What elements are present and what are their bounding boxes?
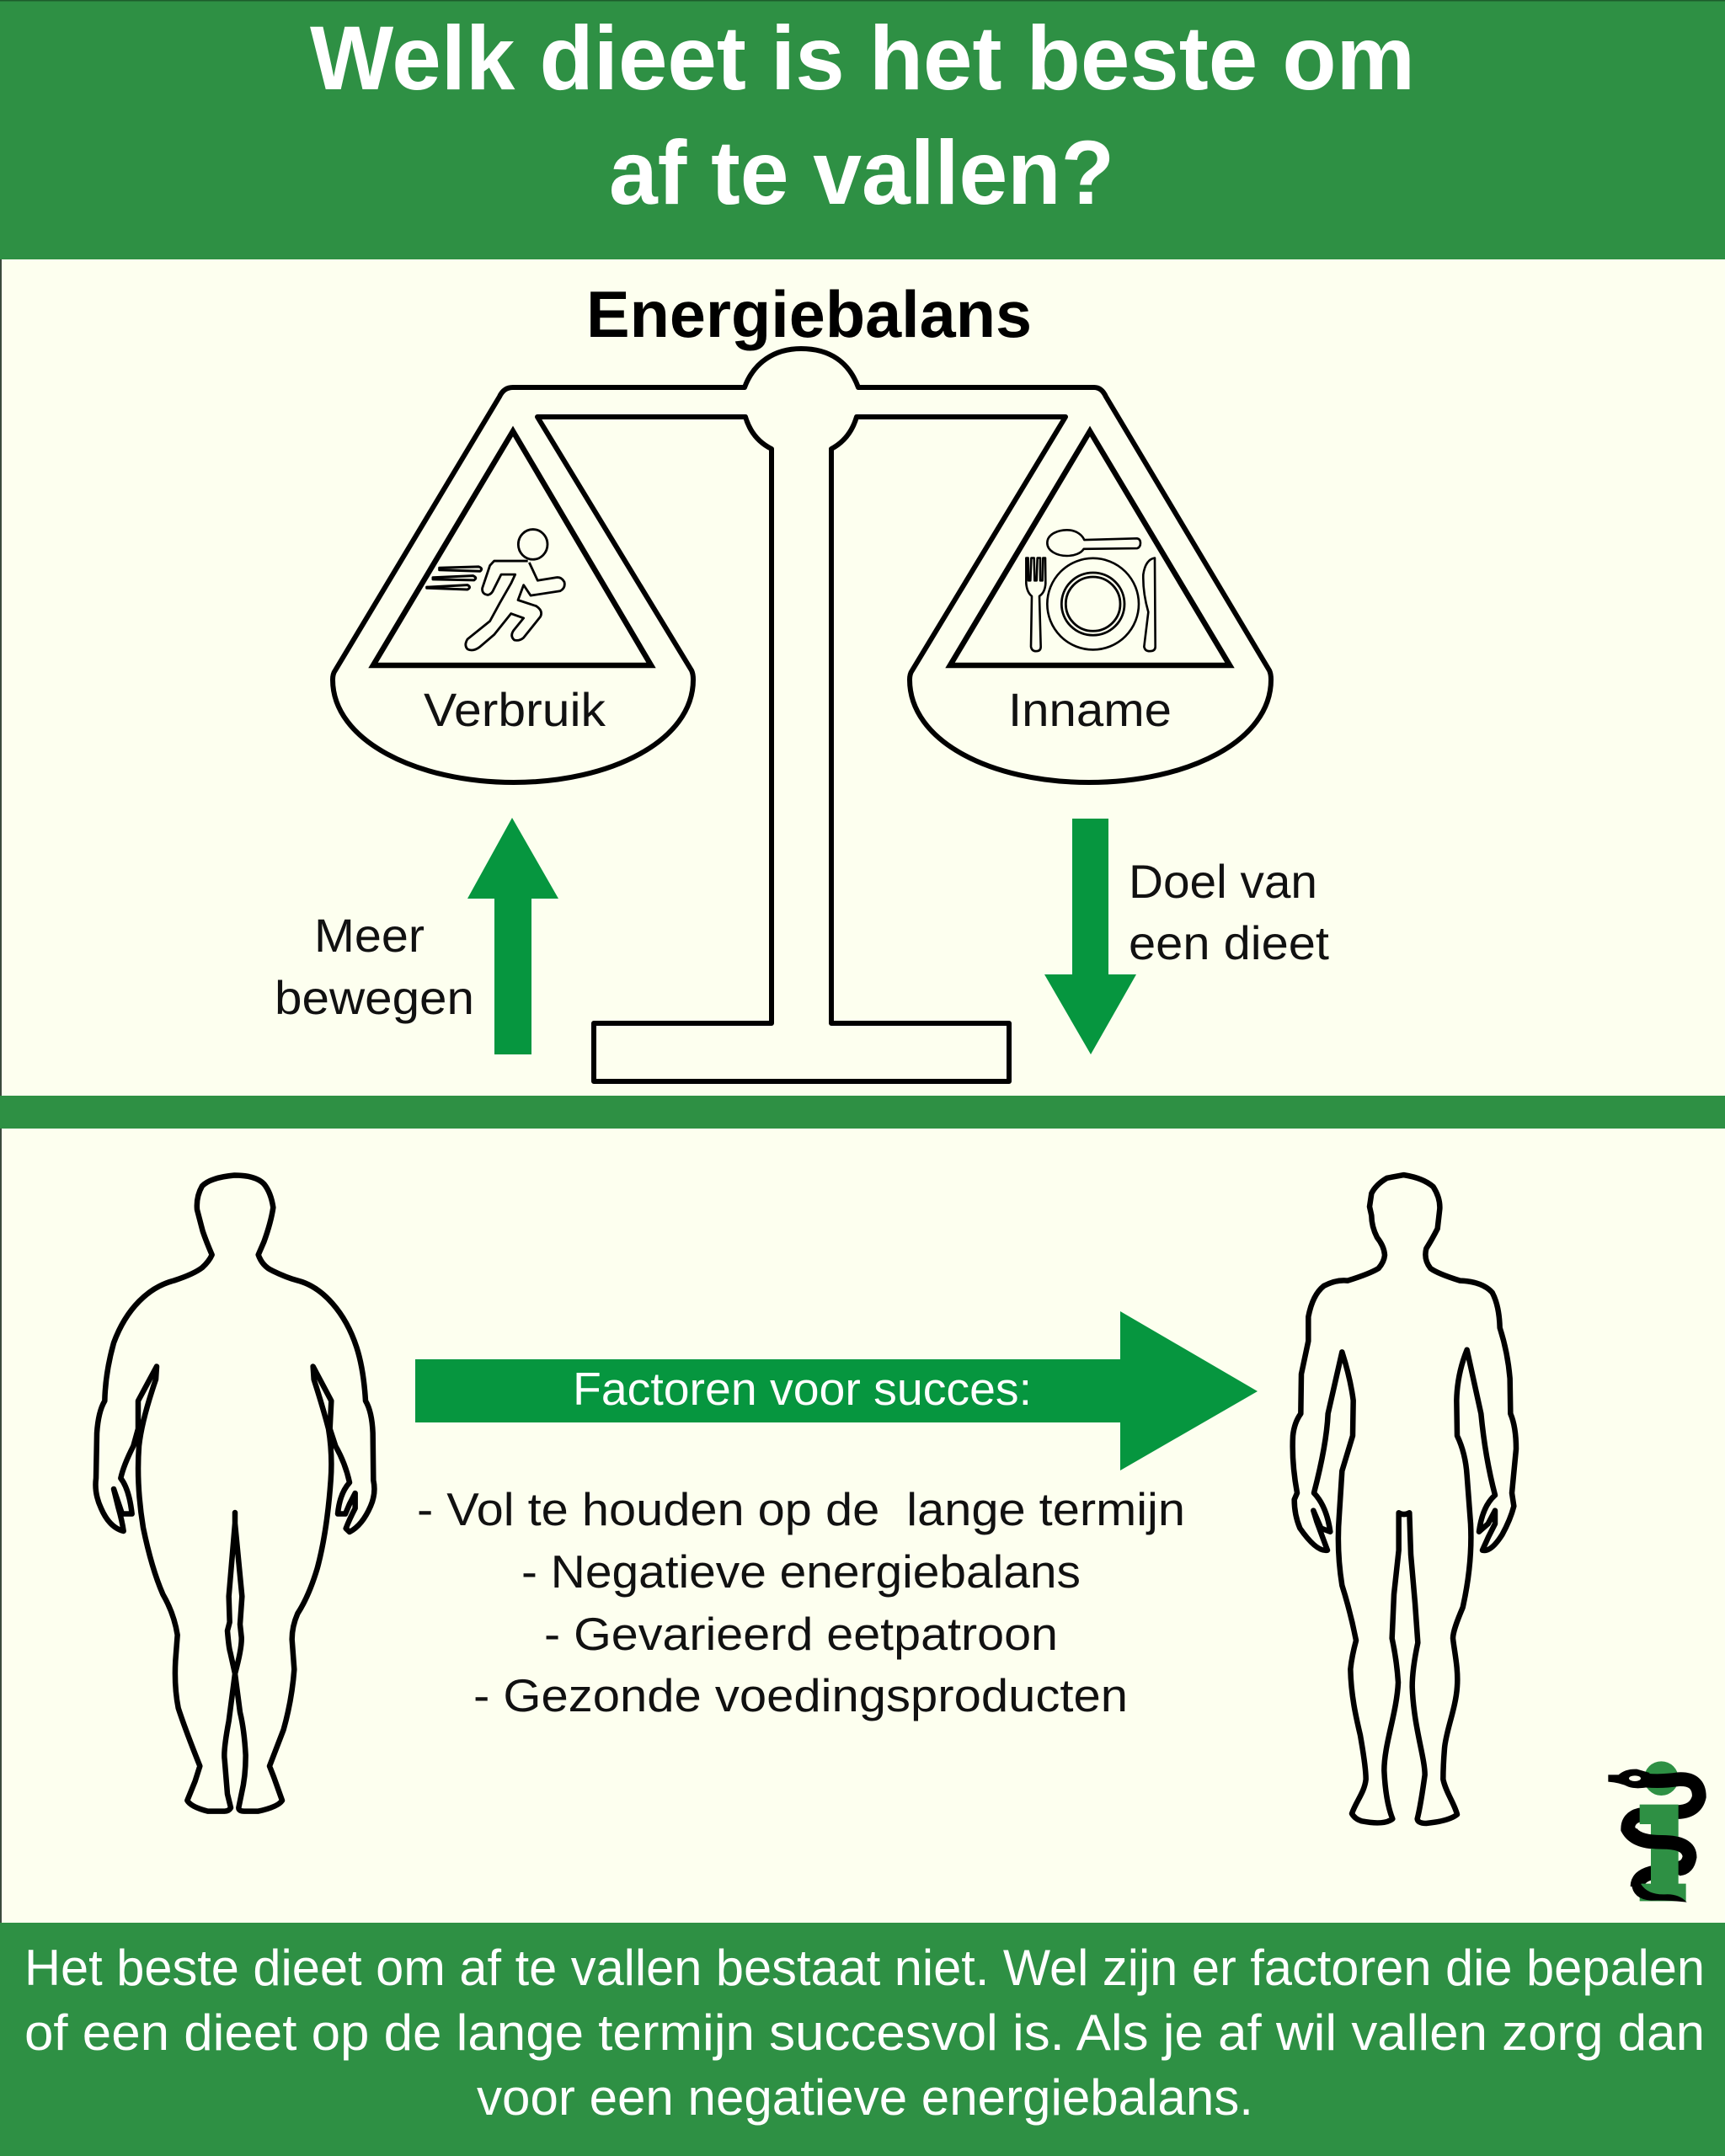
text: Meer bewegen: Meer [314,909,425,962]
arrow down: doel van een dieet [1044,819,1136,1054]
title line 1: Welk dieet is het beste om [310,7,1415,109]
arrow label: Factoren voor succes: [573,1363,1032,1415]
scale outline with pans, pillar and base [333,349,1271,1081]
green divider band [0,1096,1725,1129]
text: Doel van een dieet [1129,855,1329,969]
list: factors for success: - Gezonde voedingsproducten [473,1669,1128,1721]
logo: letter i with snake [1608,1761,1699,1903]
left pan triangle [373,431,651,665]
conclusion text: voor een negatieve energiebalans. [477,2069,1253,2126]
icon: running person [427,530,564,650]
conclusion text: Het beste dieet om af te vallen bestaat niet. Wel zijn er factoren die bepalen [24,1940,1705,1996]
label: Inname: Inname [1008,683,1172,736]
text: Meer bewegen [275,909,474,1024]
balance scale [333,349,1271,1081]
title line 2: af te vallen? [609,121,1114,223]
figure: overweight body outline [95,1176,374,1812]
conclusion text: of een dieet op de lange termijn succesvol is. Als je af wil vallen zorg dan [24,2004,1705,2061]
footer banner with conclusion [0,1923,1725,2156]
text: Meer bewegen: bewegen [275,971,474,1024]
text: Doel van een dieet: Doel van [1129,855,1317,908]
arrow right with label: factoren voor succes [415,1311,1258,1470]
list: factors for success: - Vol te houden op de lange termijn [417,1483,1185,1535]
icon: plate with spoon, fork and knife [1026,530,1156,651]
heading: Energiebalans: Energiebalans [586,277,1032,351]
conclusion text [24,1940,1705,2126]
list: factors for success: - Negatieve energiebalans [521,1545,1081,1598]
arrow up: meer bewegen [467,818,558,1054]
header banner with title [0,0,1725,259]
text: Doel van een dieet: een dieet [1129,916,1329,969]
list: factors for success: - Gevarieerd eetpatroon [544,1608,1058,1660]
right pan triangle [950,431,1230,665]
list: factors for success [417,1483,1185,1721]
label: Verbruik: Verbruik [424,683,606,736]
figure: slim body outline [1293,1175,1516,1823]
